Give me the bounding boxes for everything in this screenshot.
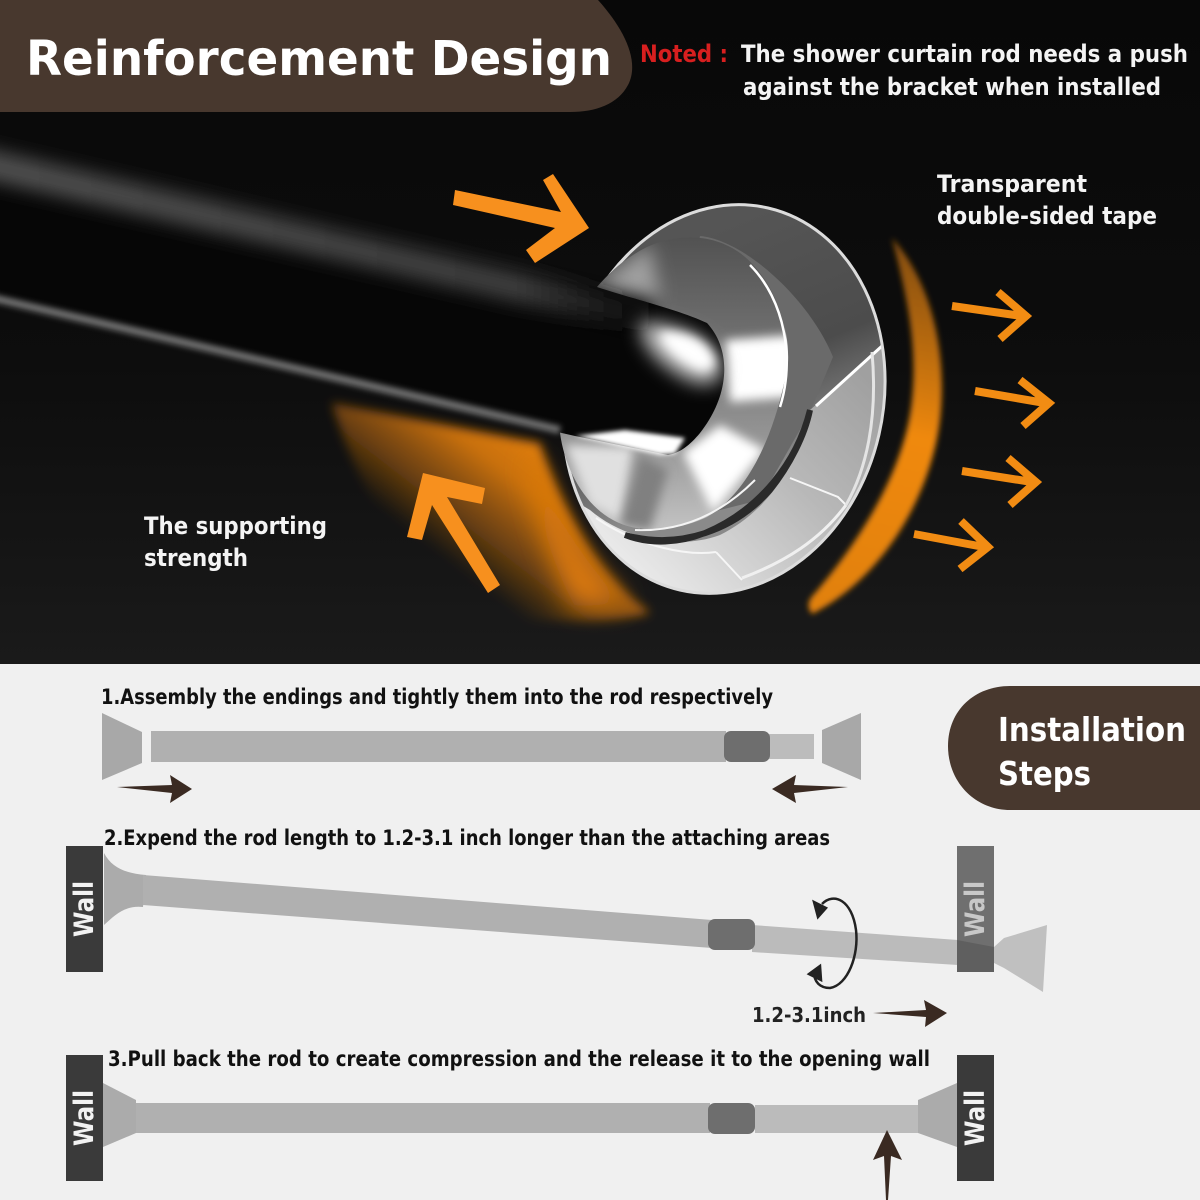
arrow: extension [873,1000,947,1027]
step 2 tilted rod [104,853,1047,992]
cone [560,238,788,529]
arrows: tape force [914,292,1049,569]
note text [640,40,1188,101]
rod highlight [660,332,714,370]
bracket flange [560,203,887,595]
installation steps badge: Steps [998,754,1091,793]
dark ring [625,410,810,542]
label: supporting strength: strength [144,544,248,572]
arrow: support [407,473,500,593]
step 1 rod diagram [102,713,861,780]
step 3 wall right: Wall [960,1090,991,1146]
flange rim [525,172,923,626]
rod upper sheen [0,158,650,318]
panel: light installation background [0,664,1200,1200]
rod lower sheen [0,295,560,430]
step 2 wall right [957,846,994,972]
label: supporting strength [144,512,327,572]
rod [0,155,724,455]
label: transparent tape [937,170,1157,230]
label: transparent tape: Transparent [937,170,1087,198]
label: supporting strength: The supporting [144,512,327,540]
rod reflection [575,430,685,455]
heading badge: Reinforcement Design: Reinforcement Design [26,31,612,87]
clear tape tabs [584,348,884,592]
installation steps badge [948,686,1200,810]
step 2 caption: 2.Expend the rod length to 1.2-3.1 inch longer than the attaching areas [104,826,830,850]
step 3 caption: 3.Pull back the rod to create compression and the release it to the opening wall [108,1047,930,1071]
arrow: step 1 left [772,775,848,803]
icon: rotation arrows [809,899,856,988]
orange band right edge glow [530,455,628,606]
step 2 wall left: Wall [69,881,100,937]
step 3 wall left [66,1055,103,1181]
orange band: supporting strength [332,403,650,621]
step 3 wall left: Wall [69,1090,100,1146]
step 2 wall right: Wall [960,881,991,937]
step 3 wall right [957,1055,994,1181]
arrow: push up [873,1130,902,1200]
rod cap glow [640,322,722,384]
measurement label: 1.2-3.1inch [752,1003,866,1027]
note text: Noted : [640,40,728,68]
step 2 wall left [66,846,103,972]
step 3 rod [103,1083,957,1147]
orange band: tape pressure [809,238,942,614]
heading badge: Reinforcement Design [0,0,632,112]
label: transparent tape: double-sided tape [937,202,1157,230]
flange ridge [640,236,833,530]
panel: dark reinforcement background [0,0,1200,664]
arrow: top pressure [453,174,589,263]
step 1 caption: 1.Assembly the endings and tightly them into the rod respectively [101,685,773,709]
arrow: step 1 right [117,775,192,803]
